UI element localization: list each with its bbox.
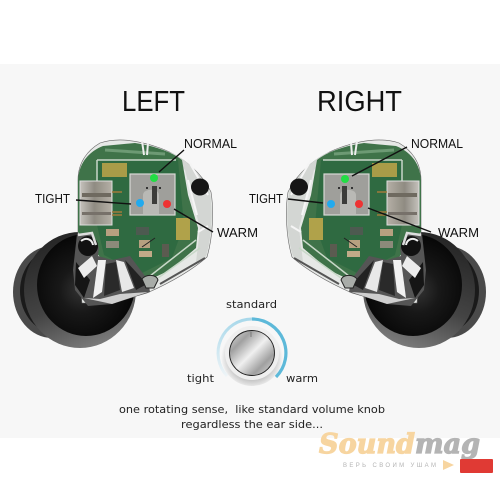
left warm label: WARM: [217, 226, 258, 240]
right tight label: TIGHT: [249, 192, 283, 206]
logo red block: [460, 459, 493, 473]
watermark logo: ВЕРЬ СВОИМ УШАМ: [343, 463, 436, 469]
right callouts: [249, 137, 479, 240]
left heading: LEFT: [122, 86, 185, 118]
knob label tight: tight: [187, 373, 214, 385]
background panel: [0, 64, 500, 438]
watermark logo: mag: [415, 429, 480, 460]
knob label warm: warm: [286, 373, 318, 385]
watermark logo: Sound: [319, 429, 415, 460]
logo triangle: [443, 460, 454, 470]
left callouts: [35, 137, 258, 240]
right warm label: WARM: [438, 226, 479, 240]
right dot normal: [341, 175, 349, 183]
right dot tight: [327, 200, 335, 208]
caption: [119, 404, 385, 431]
left dot normal: [150, 174, 158, 182]
right earphone: [286, 140, 486, 348]
left dot tight: [136, 199, 144, 207]
left normal label: NORMAL: [184, 137, 237, 151]
caption: regardless the ear side...: [181, 419, 323, 431]
left dot warm: [163, 200, 171, 208]
right dot warm: [355, 200, 363, 208]
caption: one rotating sense, like standard volume knob: [119, 404, 385, 416]
right heading: RIGHT: [317, 86, 402, 118]
knob label standard: standard: [226, 299, 277, 311]
knob dial: [218, 319, 286, 386]
left tight label: TIGHT: [35, 192, 70, 206]
right normal label: NORMAL: [411, 137, 463, 151]
watermark logo: [319, 429, 493, 473]
left earphone: [13, 140, 213, 348]
